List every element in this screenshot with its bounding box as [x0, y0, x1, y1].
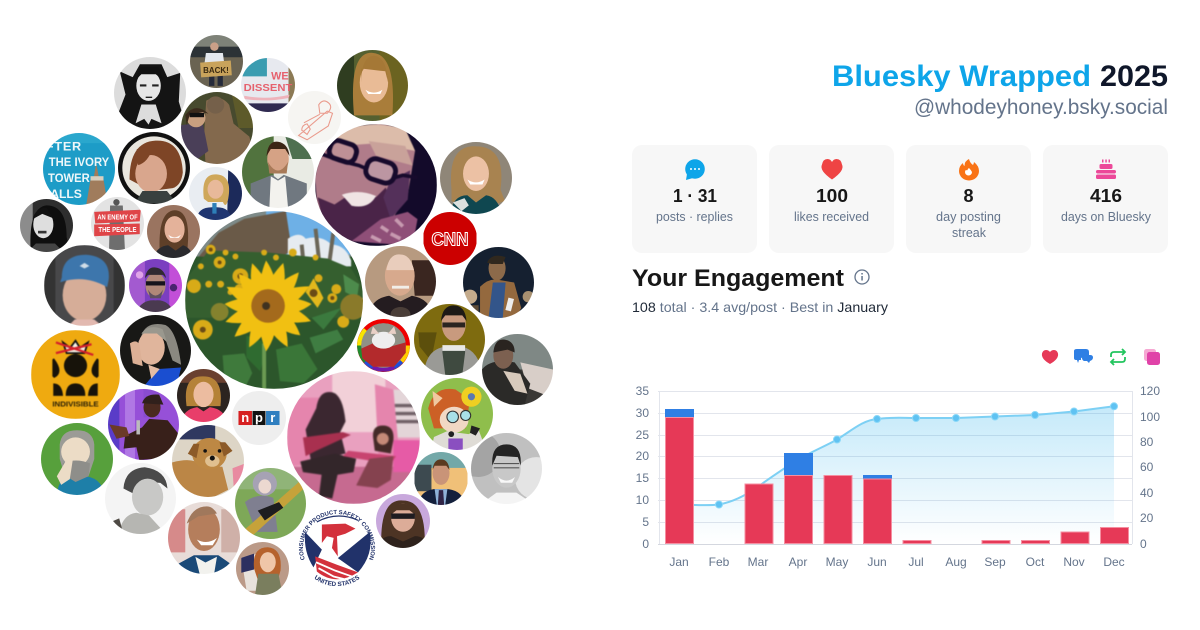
avatar: after the ivory tower falls book: FTER	[46, 139, 82, 153]
left axis labels: 35	[636, 384, 649, 398]
chart: monthly engagement bars and cumulative line	[636, 384, 1160, 569]
avatar: fluffy tan dog	[172, 425, 244, 497]
stat card: posts and replies	[632, 145, 757, 253]
stat card: posts and replies: 1 · 31	[673, 186, 717, 206]
stat card: likes received: likes received	[794, 210, 869, 224]
avatar: cartoon bearded man on green	[41, 423, 113, 495]
month labels: Sep	[984, 555, 1006, 569]
month labels: Mar	[748, 555, 768, 569]
right axis labels: 80	[1140, 435, 1154, 449]
stat card: likes received	[769, 145, 894, 253]
avatar: indivisible logo: INDIVISIBLE	[52, 401, 99, 409]
avatar: pink room with guitar	[287, 371, 420, 504]
avatar: CNN logo	[424, 212, 476, 265]
stat card: posts and replies: posts · replies	[656, 210, 733, 224]
engagement summary: 108 total · 3.4 avg/post · Best in January	[632, 299, 888, 315]
right axis labels: 20	[1140, 511, 1154, 525]
avatar: woman with silver hair	[120, 315, 191, 386]
icon: reposts	[1111, 349, 1125, 365]
avatar: painting of man in brown jacket	[463, 247, 534, 318]
avatar: indivisible logo	[31, 330, 120, 419]
avatar: brunette woman smiling	[147, 205, 200, 258]
avatar: consumer product safety commission seal: UNITED STATES	[314, 575, 360, 586]
icon: chat bubble	[685, 159, 705, 180]
avatar: consumer product safety commission seal: CONSUMER PRODUCT SAFETY COMMISSION	[298, 510, 376, 560]
avatar: we dissent sign: DISSENT	[244, 83, 293, 94]
avatar: greyscale man with glasses	[471, 433, 542, 504]
avatar: NPR logo	[232, 391, 286, 445]
stat card: likes received: 100	[816, 186, 848, 206]
avatar: NPR logo: n	[241, 410, 249, 425]
icon: cake	[1096, 160, 1116, 179]
avatar: after the ivory tower falls book: ALLS	[50, 187, 82, 201]
stat card: day posting streak: streak	[952, 226, 987, 240]
avatar: dog with rainbow ring	[357, 319, 410, 372]
reply bars	[665, 409, 892, 480]
avatar: NPR logo: r	[270, 410, 275, 425]
icon: info	[855, 270, 869, 284]
left axis labels: 20	[636, 449, 649, 463]
icon: replies	[1074, 349, 1093, 363]
icon: flame	[959, 159, 979, 180]
cumulative area and line	[679, 403, 1118, 544]
month labels: May	[826, 555, 848, 569]
month labels: Oct	[1026, 555, 1045, 569]
title: Bluesky Wrapped	[832, 60, 1091, 93]
avatar: goth illustration	[114, 57, 186, 129]
avatar: NPR logo: p	[255, 410, 263, 425]
left axis labels: 10	[636, 493, 649, 507]
avatar: smiling man in blue suit	[168, 502, 240, 574]
avatar: an enemy of the people: AN ENEMY OF	[97, 214, 138, 221]
avatar: protester with sign: BACK!	[203, 66, 229, 75]
month labels: Apr	[789, 555, 807, 569]
avatar: after the ivory tower falls book	[43, 133, 115, 205]
right axis labels: 60	[1140, 460, 1154, 474]
avatar: after the ivory tower falls book: THE IVORY	[49, 155, 109, 169]
avatar: curly haired woman	[440, 142, 512, 214]
avatar: consumer product safety commission seal	[298, 510, 376, 586]
avatar: man with glasses on olive	[414, 304, 485, 375]
right axis labels	[1140, 384, 1160, 551]
month labels	[669, 555, 1125, 569]
right axis labels: 0	[1140, 537, 1147, 551]
left axis labels: 15	[636, 471, 649, 485]
avatar bubble cloud	[20, 35, 553, 595]
avatar: monkey with toy rifle	[235, 468, 306, 539]
avatar: sunflower field	[185, 211, 363, 389]
avatar: an enemy of the people: THE PEOPLE	[98, 227, 137, 234]
avatar: woman with glasses and curls	[376, 494, 430, 548]
left axis labels: 25	[636, 428, 649, 442]
avatar: woman with black ring	[118, 132, 190, 204]
stat card: days on Bluesky: 416	[1090, 186, 1122, 206]
avatar: red-haired girl with flag	[236, 542, 289, 595]
month labels: Nov	[1063, 555, 1085, 569]
avatar: black and white portrait	[20, 199, 73, 252]
right axis labels: 100	[1140, 410, 1160, 424]
stat card: days on Bluesky: days on Bluesky	[1061, 210, 1152, 224]
avatar: woman in blue cap	[44, 245, 125, 326]
avatar: man on purple stage	[108, 389, 179, 460]
icon: likes	[1042, 350, 1058, 364]
avatar: man in grey suit	[242, 136, 314, 208]
user handle: @whodeyhoney.bsky.social	[914, 96, 1168, 119]
month labels: Jun	[867, 555, 887, 569]
avatar: smiling bearded man with glasses	[315, 124, 437, 246]
avatar: man at sunset capitol	[414, 452, 468, 505]
avatar: man with dark coat	[482, 334, 553, 405]
left axis labels: 0	[642, 537, 649, 551]
icon: quotes	[1144, 349, 1160, 365]
left axis labels: 5	[642, 515, 649, 529]
month labels: Dec	[1103, 555, 1125, 569]
avatar: ginger-haired woman	[337, 50, 408, 121]
avatar: woman with bear statue	[181, 92, 253, 164]
avatar: an enemy of the people	[91, 197, 144, 250]
month labels: Jan	[669, 555, 689, 569]
stat card: day posting streak: 8	[963, 186, 974, 206]
month labels: Jul	[908, 555, 924, 569]
title: 2025	[1100, 60, 1168, 93]
right axis labels: 120	[1140, 384, 1160, 398]
avatar: man with glasses on purple	[129, 259, 182, 312]
heading: your engagement: Your Engagement	[632, 265, 844, 292]
avatar: CNN logo: CNN	[431, 229, 469, 249]
chart legend icons	[1042, 349, 1160, 365]
right axis labels: 40	[1140, 486, 1154, 500]
avatar: we dissent sign: WE	[271, 71, 289, 83]
left axis labels: 30	[636, 406, 649, 420]
avatar: bald man	[365, 246, 436, 317]
left axis labels	[636, 384, 649, 551]
avatar: blonde woman in pink	[177, 369, 230, 422]
stat card: day posting streak: day posting	[936, 210, 1001, 224]
month labels: Feb	[709, 555, 730, 569]
avatar: we dissent sign	[241, 58, 295, 112]
stat card: day posting streak	[906, 145, 1031, 253]
avatar: cartoon with sunflower	[421, 378, 493, 450]
like bars	[666, 418, 1128, 544]
avatar: protester with sign	[190, 35, 243, 88]
avatar: blonde woman in navy	[189, 167, 242, 220]
avatar: pencil sketch woman	[105, 463, 176, 534]
stat card: days on Bluesky	[1043, 145, 1168, 253]
avatar: after the ivory tower falls book: TOWER	[48, 171, 90, 185]
icon: heart	[821, 159, 843, 180]
month labels: Aug	[945, 555, 967, 569]
avatar: red line sketch	[288, 91, 341, 144]
